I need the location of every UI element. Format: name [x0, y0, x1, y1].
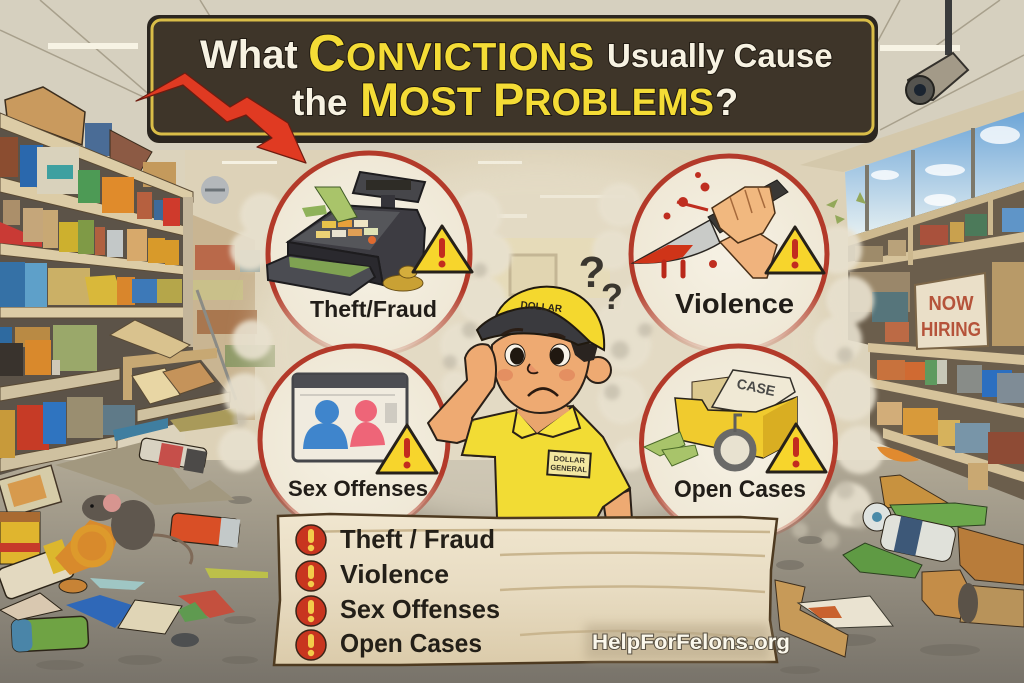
left shelves	[0, 87, 238, 475]
floor litter left	[0, 437, 268, 652]
title line 2: M	[360, 73, 399, 126]
icon: security camera	[906, 0, 968, 104]
list item: violence: Violence	[340, 559, 449, 589]
worker character	[428, 287, 632, 520]
icon: warning triangle	[766, 227, 824, 273]
title line 1: What	[200, 33, 298, 77]
now hiring sign	[915, 273, 988, 349]
right windows	[800, 90, 1024, 237]
floor litter right	[775, 447, 1024, 657]
panel: open cases	[642, 346, 836, 540]
name badge: GENERAL	[550, 463, 588, 474]
name badge: DOLLAR	[553, 454, 586, 465]
question marks: ?	[601, 276, 623, 317]
website credit: HelpForFelons.org	[592, 631, 790, 654]
now hiring sign: HIRING	[921, 319, 981, 341]
label: theft/fraud: Theft/Fraud	[310, 296, 437, 322]
label: open cases: Open Cases	[674, 476, 806, 503]
panel: sex offenses	[260, 346, 448, 534]
list item: violence	[296, 559, 449, 591]
now hiring sign: NOW	[928, 293, 974, 315]
icon: case folder and handcuffs	[644, 370, 797, 468]
list item: sex offenses: Sex Offenses	[340, 594, 500, 624]
red down arrow	[136, 73, 306, 163]
floor pebbles	[36, 496, 980, 674]
panel: theft/fraud	[267, 153, 472, 355]
right ear	[585, 357, 611, 383]
cap	[495, 287, 604, 350]
title line 2: the	[292, 82, 348, 123]
neck	[517, 400, 570, 433]
name badge	[547, 451, 591, 477]
list item: theft / fraud: Theft / Fraud	[340, 524, 495, 554]
icon: rat	[82, 494, 192, 564]
background shelves in centre aisle	[193, 176, 556, 420]
title line 2: OST	[399, 80, 481, 124]
question marks: ?	[579, 248, 605, 297]
icon: bloody knife	[633, 172, 788, 278]
head	[492, 330, 590, 413]
title line 1: Usually Cause	[607, 37, 833, 74]
face	[505, 344, 525, 366]
title banner	[147, 15, 878, 143]
icon: cash register	[267, 172, 425, 295]
icon: warning triangle	[767, 424, 826, 472]
title line 1: C	[308, 25, 346, 83]
icon: warning triangle	[413, 226, 472, 272]
darker lower edge behind credit	[585, 624, 770, 660]
list item: open cases: Open Cases	[340, 628, 482, 658]
label: violence: Violence	[675, 288, 794, 319]
worker character: DOLLAR	[520, 300, 563, 315]
right shelves	[848, 182, 1024, 500]
icon: case folder and handcuffs: CASE	[735, 375, 777, 399]
list item: open cases	[296, 628, 482, 660]
question marks	[579, 248, 623, 317]
icon: warning triangle	[377, 425, 437, 473]
shirt	[462, 406, 630, 518]
raised arm and hand	[428, 344, 496, 443]
cardboard box on top shelf	[5, 87, 85, 145]
title line 2: ?	[715, 82, 738, 124]
icon: browser window with two people	[293, 374, 407, 461]
title line 2: P	[493, 73, 524, 126]
title line 2: ROBLEMS	[524, 82, 714, 124]
right forearm	[603, 490, 632, 520]
panel: violence	[631, 156, 827, 352]
smoke clouds	[218, 160, 884, 549]
label: sex offenses: Sex Offenses	[288, 476, 428, 501]
panel: wooden sign list	[274, 514, 790, 665]
title line 1: ONVICTIONS	[346, 36, 595, 79]
